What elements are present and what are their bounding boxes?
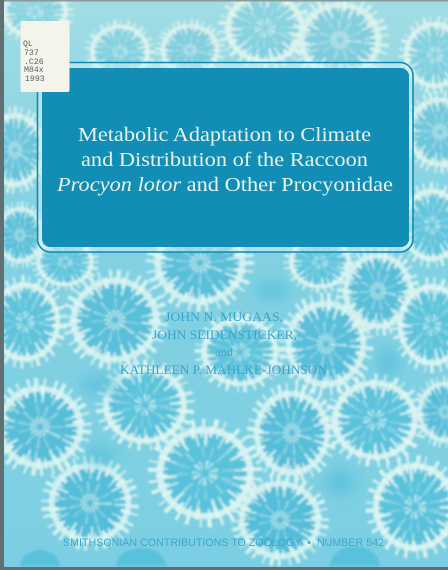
authors: KATHLEEN P. MAHLKE-JOHNSON <box>120 363 327 377</box>
authors: JOHN SEIDENSTICKER, <box>152 328 297 342</box>
call number text: 737 <box>24 49 39 58</box>
title text: and Distribution of the Raccoon <box>81 149 368 171</box>
call number text: QL <box>23 40 33 49</box>
title text: Procyon lotor and Other Procyonidae <box>56 174 393 196</box>
authors: JOHN N. MUGAAS, <box>165 310 283 324</box>
title text: Metabolic Adaptation to Climate <box>78 124 371 146</box>
call number text: M84x <box>24 66 44 75</box>
authors <box>120 310 327 377</box>
library call number sticker <box>20 21 70 92</box>
series line: SMITHSONIAN CONTRIBUTIONS TO ZOOLOGY • NUMBER 542 <box>63 537 384 549</box>
call number text <box>23 40 45 84</box>
authors: and <box>215 347 233 359</box>
call number text: .C26 <box>24 58 44 67</box>
title panel <box>38 62 413 252</box>
call number text: 1993 <box>25 75 45 84</box>
title text <box>56 124 393 196</box>
